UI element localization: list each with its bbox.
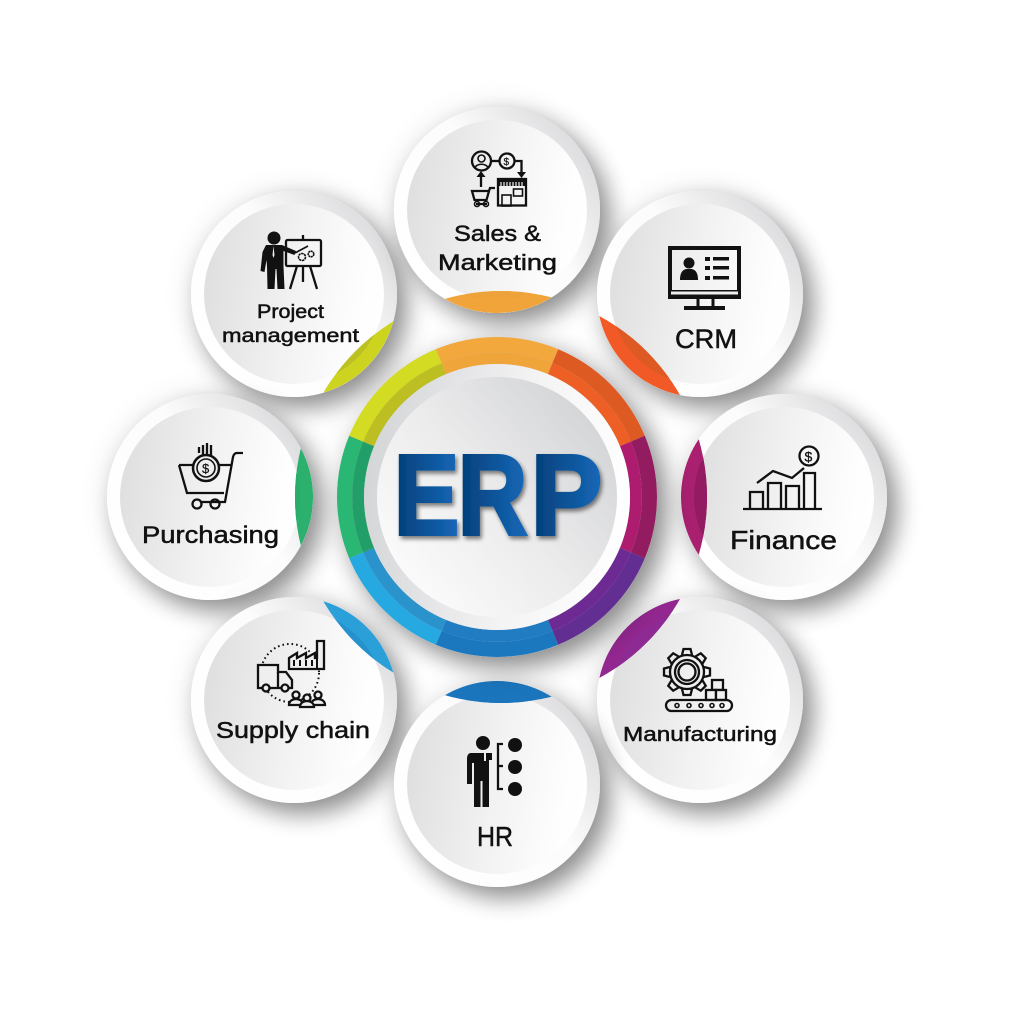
segment: sky (349, 548, 446, 645)
segment: blue (436, 620, 558, 657)
colour lens (295, 448, 313, 546)
icon: gear and conveyor (664, 649, 732, 711)
hub plate (364, 364, 630, 630)
circle plate (191, 191, 397, 397)
segment: orange (436, 337, 558, 374)
disc (120, 407, 300, 587)
title: ERP (394, 432, 602, 558)
label: Finance (730, 525, 837, 555)
label: Project (257, 302, 325, 323)
colour lens (444, 291, 552, 313)
panel: Finance (672, 386, 912, 626)
disc (204, 610, 384, 790)
colour lens (681, 439, 707, 555)
colour ring (337, 337, 657, 657)
panel: HR (384, 672, 625, 913)
disc (610, 610, 790, 790)
panel: Sales & Marketing (384, 98, 625, 338)
icon: monitor with profile (668, 248, 741, 310)
icon: person and org chart (467, 736, 522, 807)
icon: cart with coin (179, 443, 243, 508)
icon: cart with coin: $ (202, 461, 210, 476)
panel: Purchasing (98, 385, 338, 626)
icon: presenter at board (260, 232, 321, 289)
colour lens (599, 316, 680, 395)
circle plate (107, 394, 313, 600)
circle plate (394, 681, 600, 887)
circle plate (597, 597, 803, 803)
colour lens (323, 321, 394, 393)
hub disc (377, 377, 617, 617)
ERP infographic (98, 98, 912, 913)
colour lens (444, 681, 552, 703)
disc (610, 204, 790, 384)
disc (204, 204, 384, 384)
segment: yellow (349, 349, 446, 446)
icon: growth chart (743, 446, 822, 509)
circle plate (191, 597, 397, 803)
icon: sales cycle: $ (504, 157, 510, 168)
label: CRM (675, 324, 737, 354)
panel: CRM (588, 182, 828, 423)
label: Manufacturing (623, 724, 777, 746)
title: ERP: P (531, 432, 602, 558)
circle plate (681, 394, 887, 600)
panel: central ERP hub (337, 337, 657, 657)
disc (407, 694, 587, 874)
label: Marketing (438, 250, 557, 275)
title: ERP: R (458, 432, 527, 558)
label (222, 302, 360, 347)
disc (407, 120, 587, 300)
disc (694, 407, 874, 587)
circle plate (597, 191, 803, 397)
colour lens (599, 599, 680, 678)
icon: sales cycle (472, 152, 526, 206)
circle plate (394, 107, 600, 313)
icon: growth chart: $ (804, 448, 812, 464)
segment: purple (548, 548, 645, 645)
label: management (222, 326, 360, 347)
label: Supply chain (216, 717, 370, 743)
label: Sales & (454, 221, 541, 246)
segment: magenta (620, 436, 657, 558)
label: HR (477, 821, 513, 852)
segment: red-orange (548, 349, 645, 446)
segment: green (337, 436, 374, 558)
panel: Project management (182, 182, 422, 423)
panel: Supply chain (182, 588, 422, 829)
icon: logistics (258, 641, 325, 707)
panel: Manufacturing (588, 588, 828, 829)
label (438, 221, 557, 275)
title: ERP: E (394, 432, 459, 558)
label: Purchasing (142, 522, 279, 549)
colour lens (323, 601, 394, 673)
